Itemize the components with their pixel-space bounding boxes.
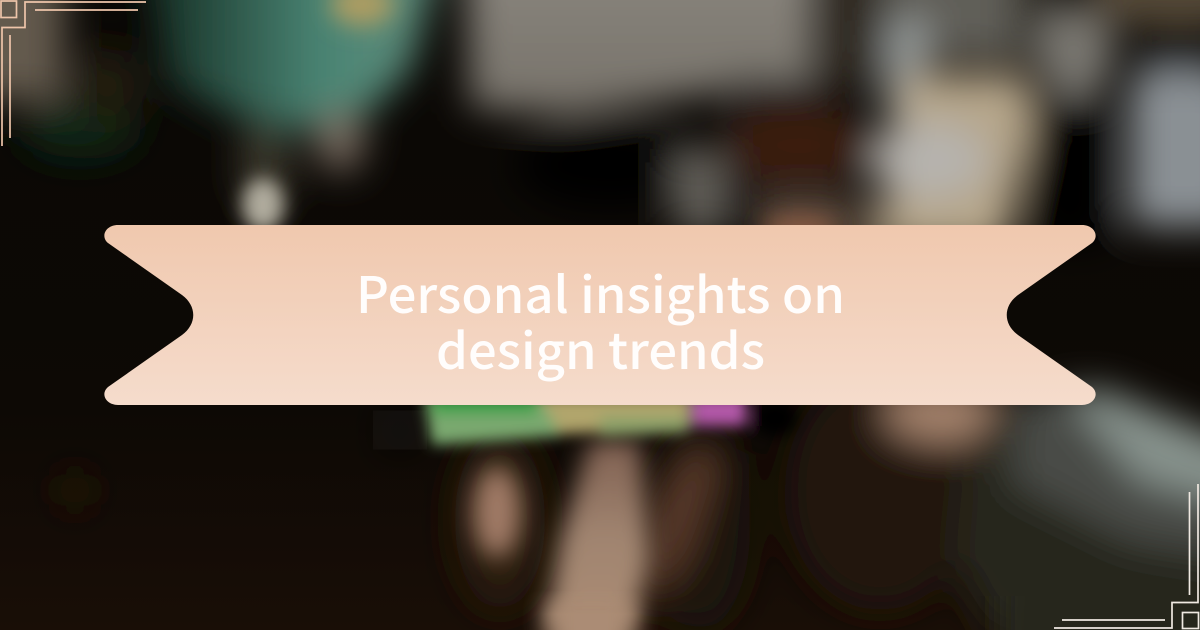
title: Personal insights on xyxy=(356,256,845,328)
title: design trends xyxy=(436,312,765,384)
corner ornament: top left xyxy=(1,1,146,146)
arm and sweater xyxy=(785,370,975,610)
globe xyxy=(140,0,445,135)
ribbon shape xyxy=(104,225,1096,405)
phone screen xyxy=(424,396,797,445)
corner ornament: bottom right xyxy=(1054,484,1198,628)
fingers xyxy=(455,430,545,610)
bottom edge fill xyxy=(549,590,1200,630)
title xyxy=(356,256,845,384)
ribbon banner with title xyxy=(104,225,1096,405)
fingers near xyxy=(330,0,838,630)
top shelf xyxy=(465,0,815,115)
right shelf xyxy=(880,0,1025,60)
